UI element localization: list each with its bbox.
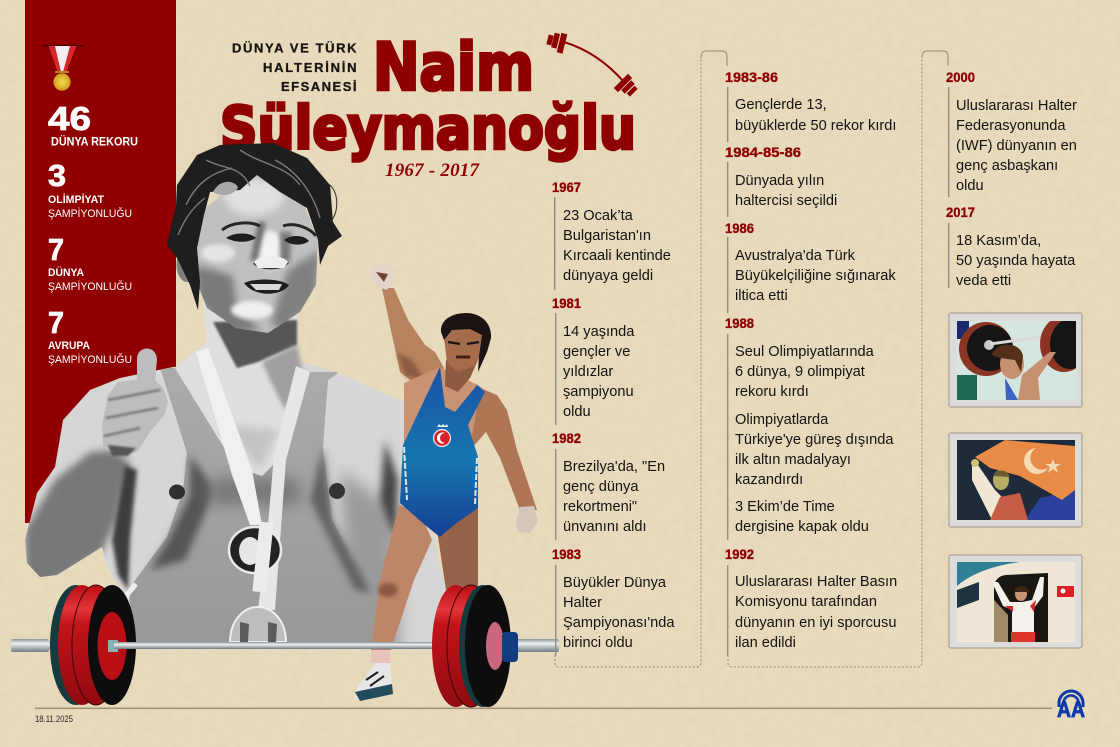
entry: 1983: 1983 (552, 546, 581, 562)
stat: 3 olympic titles (48, 158, 132, 220)
entry: 1988: 1988 (725, 315, 754, 331)
title: name: Naim (373, 30, 534, 106)
entry: 1983: Şampiyonası'nda (563, 615, 675, 631)
entry: 2000: (IWF) dünyanın en (956, 138, 1077, 154)
entry: 1986: 1986 (725, 220, 754, 236)
fist (370, 263, 394, 290)
entry: 1988: dergisine kapak oldu (735, 519, 869, 535)
figure: barbell (11, 585, 559, 707)
entry: 1983: birinci oldu (563, 635, 633, 651)
entry: 1983: Halter (563, 595, 602, 611)
entry: 2000: oldu (956, 178, 984, 194)
entry: 2017: 2017 (946, 204, 975, 220)
sock and shoe (354, 650, 393, 701)
entry: 1981 (552, 295, 635, 425)
entry: 1988: rekoru kırdı (735, 384, 809, 400)
entry: 1981: oldu (563, 404, 591, 420)
entry: 1988: Seul Olimpiyatlarında (735, 344, 875, 360)
entry: 1967: 1967 (552, 179, 581, 195)
heading: subtitle: HALTERİNİN (263, 60, 356, 75)
bar (48, 642, 518, 649)
stat: 3 olympic titles: 3 (48, 158, 66, 193)
emblem (434, 430, 450, 446)
stat: 46 world records: 46 (48, 100, 91, 137)
photo: overhead lift (949, 313, 1090, 407)
entry: 1984-85-86: 1984-85-86 (725, 144, 801, 160)
entry: 1967: Bulgaristan'ın (563, 228, 651, 244)
entry: 1982: rekortmeni" (563, 499, 637, 515)
text: life dates: 1967 - 2017 (385, 160, 480, 181)
heading: subtitle: DÜNYA VE TÜRK (232, 40, 357, 56)
icon: AA logo: AA (1057, 697, 1085, 722)
stat: 7 european titles (48, 305, 132, 366)
entry: 1992: dünyanın en iyi sporcusu (735, 615, 896, 631)
neck (445, 360, 478, 392)
entry: 1982: 1982 (552, 430, 581, 446)
entry: 1984-85-86 (725, 144, 837, 217)
far arm (470, 388, 537, 510)
stat: 7 world titles: 7 (48, 232, 64, 267)
heading: subtitle (232, 40, 357, 94)
entry: 2000 (946, 69, 1077, 197)
entry: 2017: 18 Kasım’da, (956, 233, 1041, 249)
entry: 2017: veda etti (956, 273, 1011, 289)
stat: 3 olympic titles: OLİMPİYAT (48, 193, 104, 206)
title: name: Süleymanoğlu (220, 94, 636, 162)
entry: 2000: 2000 (946, 69, 975, 85)
stat: 7 world titles: DÜNYA (48, 266, 84, 279)
timeline column 3 (946, 69, 1077, 289)
stat: 7 world titles (48, 232, 132, 293)
entry: 1992: Uluslararası Halter Basın (735, 574, 897, 590)
photo: waving from aeroplane door (949, 555, 1082, 648)
entry: 1984-85-86: Dünyada yılın (735, 173, 824, 189)
thumbs-up fist (102, 348, 168, 456)
near leg (371, 505, 432, 650)
figure: standing athlete in blue singlet (354, 263, 538, 701)
entry: 2000: Uluslararası Halter (956, 98, 1077, 114)
entry: 1986: Avustralya'da Türk (735, 248, 856, 264)
entry: 1988: 6 dünya, 9 olimpiyat (735, 364, 865, 380)
entry: 1984-85-86: haltercisi seçildi (735, 193, 837, 209)
entry: 1967 (552, 179, 671, 290)
entry: 1988 (725, 315, 894, 540)
entry: 1981: 14 yaşında (563, 324, 635, 340)
entry: 1967: Kırcaali kentinde (563, 248, 671, 264)
timeline column 1 (552, 51, 727, 667)
entry: 1967: 23 Ocak’ta (563, 208, 634, 224)
ear (176, 248, 198, 282)
entry: 1992: Komisyonu tarafından (735, 594, 877, 610)
entry: 1986: Büyükelçiliğine sığınarak (735, 268, 896, 284)
text: date: 18.11.2025 (35, 714, 73, 725)
entry: 1983: Büyükler Dünya (563, 575, 667, 591)
photo: Turkish flag (949, 433, 1082, 527)
face (443, 328, 484, 372)
head (194, 172, 318, 333)
entry: 1967: dünyaya geldi (563, 268, 653, 284)
entry: 1988: ilk altın madalyayı (735, 452, 851, 468)
stat: 46 world records: DÜNYA REKORU (51, 134, 138, 148)
panel: red statistics band (25, 0, 176, 523)
stat: 7 european titles: ŞAMPİYONLUĞU (48, 353, 132, 366)
nose (254, 262, 288, 268)
entry: 1986 (725, 220, 896, 313)
connector: dotted frame (728, 58, 922, 667)
entry: 1992: 1992 (725, 546, 754, 562)
entry: 2000: Federasyonunda (956, 118, 1066, 134)
entry: 2017: 50 yaşında hayata (956, 253, 1076, 269)
entry: 1988: Türkiye'ye güreş dışında (735, 432, 894, 448)
entry: 1983-86 (725, 69, 896, 142)
entry: 1988: kazandırdı (735, 472, 803, 488)
stat: 3 olympic titles: ŞAMPİYONLUĞU (48, 207, 132, 220)
hair (441, 313, 491, 372)
far leg (437, 500, 478, 590)
entry: 1992 (725, 546, 897, 656)
neck (175, 300, 303, 476)
entry: 2017 (946, 204, 1076, 289)
title: name (220, 30, 636, 162)
brows and eyes (222, 223, 316, 236)
singlet (129, 368, 358, 642)
entry: 1988: 3 Ekim’de Time (735, 499, 835, 515)
hair (167, 143, 342, 310)
connector: dotted frame (555, 58, 701, 667)
stat: 7 european titles: 7 (48, 305, 64, 340)
entry: 1983-86: Gençlerde 13, (735, 97, 827, 113)
hand (516, 506, 538, 533)
nipples (169, 484, 185, 500)
figure: large portrait of the athlete (25, 143, 447, 660)
entry: 1982: genç dünya (563, 479, 639, 495)
entry: 2000: genç asbaşkanı (956, 158, 1058, 174)
entry: 1986: iltica etti (735, 288, 788, 304)
entry: 1981: şampiyonu (563, 384, 634, 400)
entry: 1983-86: büyüklerde 50 rekor kırdı (735, 118, 896, 134)
raised arm (382, 288, 444, 395)
mouth (244, 279, 289, 294)
entry: 1982 (552, 430, 665, 540)
heading: subtitle: EFSANESİ (281, 79, 356, 94)
forearm shade (25, 450, 130, 600)
stat: 46 world records (48, 100, 138, 148)
entry: 1981: gençler ve (563, 344, 630, 360)
entry: 1983 (552, 546, 675, 656)
stat: 7 world titles: ŞAMPİYONLUĞU (48, 280, 132, 293)
torso and arm (25, 360, 447, 643)
entry: 1992: ilan edildi (735, 635, 796, 651)
entry: 1982: Brezilya'da, "En (563, 459, 665, 475)
icon: medal (42, 45, 83, 91)
footer rule (35, 708, 1052, 709)
timeline column 2 (725, 51, 948, 667)
singlet (400, 367, 485, 537)
chest (404, 367, 488, 450)
stat: 7 european titles: AVRUPA (48, 340, 90, 352)
entry: 1982: ünvanını aldı (563, 519, 647, 535)
medals and ribbons (196, 348, 262, 525)
icon: barbell arc (546, 33, 638, 97)
entry: 1981: 1981 (552, 295, 581, 311)
right plates (432, 585, 518, 707)
left plates (50, 585, 136, 705)
entry: 1988: Olimpiyatlarda (735, 412, 829, 428)
entry: 1981: yıldızlar (563, 364, 613, 380)
entry: 1983-86: 1983-86 (725, 69, 778, 85)
